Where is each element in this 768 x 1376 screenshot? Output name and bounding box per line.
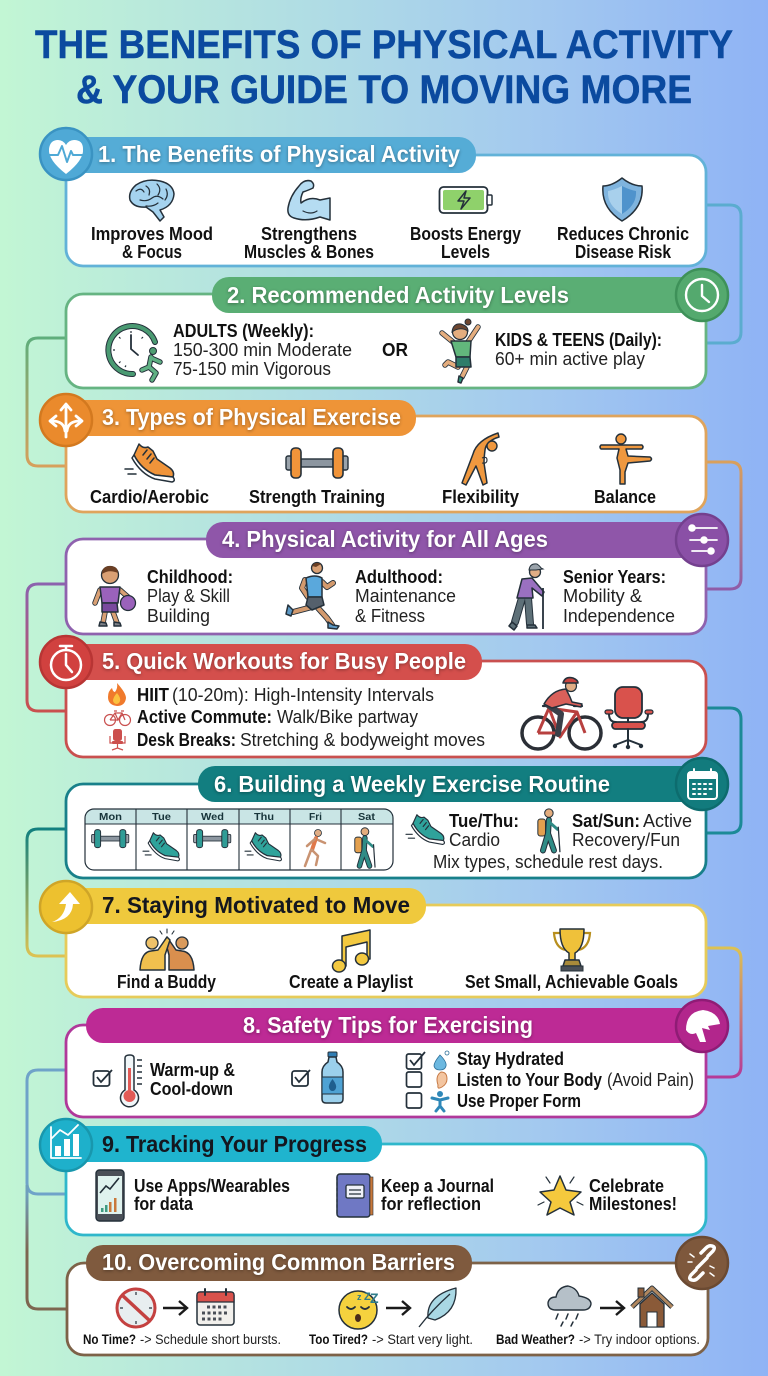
icon: brain	[130, 180, 174, 221]
text: tue thu: Cardio	[449, 829, 500, 850]
icon: thursday shoe	[245, 833, 281, 861]
text: senior: Independence	[563, 605, 675, 626]
icon: broken link badge	[676, 1237, 728, 1289]
label: boosts energy: Boosts Energy	[410, 223, 522, 244]
text: desk breaks: Stretching & bodyweight moves	[240, 729, 485, 750]
text: adults: 75-150 min Vigorous	[173, 358, 331, 379]
title	[35, 23, 733, 112]
icon: sleepy face: z	[357, 1292, 362, 1302]
connector: section 9 to 10	[27, 1185, 68, 1309]
check: proper form	[406, 1090, 581, 1111]
icon: running shoe	[125, 444, 174, 482]
text: commute: Active Commute:	[137, 706, 272, 727]
label: improves mood	[91, 223, 213, 262]
heading 10	[86, 1245, 472, 1281]
label: flexibility: Flexibility	[442, 486, 520, 507]
chart: weekly schedule: Thu	[254, 811, 274, 823]
text: childhood: Building	[147, 605, 210, 626]
icon: battery	[440, 187, 492, 213]
label: buddy: Find a Buddy	[117, 971, 217, 992]
text: no time: -> Schedule short bursts.	[140, 1332, 281, 1347]
text: sat sun	[572, 810, 692, 850]
icon: rain cloud	[548, 1286, 591, 1326]
label: reduces chronic	[557, 223, 689, 262]
text: apps: for data	[134, 1193, 194, 1214]
text: no time: No Time?	[83, 1332, 136, 1347]
label: improves mood: Improves Mood	[91, 223, 213, 244]
heading 3	[56, 400, 416, 436]
icon: sleepy face: Z	[364, 1291, 371, 1303]
icon: flame	[108, 683, 126, 706]
text: celebrate	[589, 1175, 677, 1214]
icon: monday dumbbell	[92, 830, 129, 848]
heading 9	[56, 1126, 382, 1162]
check: listen to body: Listen to Your Body	[457, 1069, 603, 1090]
label: strength: Strength Training	[249, 486, 385, 507]
arrow: tired	[386, 1301, 410, 1315]
heading 1: 1. The Benefits of Physical Activity	[98, 141, 460, 167]
label: playlist: Create a Playlist	[289, 971, 413, 992]
heading 6	[198, 766, 702, 802]
text: sat sun: Recovery/Fun	[572, 829, 680, 850]
connector: section 5 to 6	[704, 708, 741, 833]
heading 3: 3. Types of Physical Exercise	[102, 404, 401, 430]
text: senior: Senior Years:	[563, 566, 666, 587]
check: stay hydrated	[406, 1048, 564, 1070]
panel 1: benefits	[40, 128, 706, 266]
icon: star	[538, 1176, 583, 1215]
icon: house	[632, 1288, 672, 1327]
text: desk breaks	[137, 729, 485, 750]
connector: section 7 to 8	[704, 948, 741, 1077]
label: reduces chronic: Reduces Chronic	[557, 223, 689, 244]
check: listen to body	[406, 1069, 694, 1090]
panel 5: quick workouts	[40, 636, 706, 757]
text: warm up: Warm-up &	[150, 1059, 235, 1080]
text: bad weather: -> Try indoor options.	[579, 1332, 700, 1347]
arrow: time	[163, 1301, 187, 1315]
icon: sliders badge	[676, 514, 728, 566]
icon: saturday hiker	[355, 828, 375, 868]
heading 7: 7. Staying Motivated to Move	[102, 892, 410, 918]
icon: thermometer	[120, 1055, 142, 1107]
icon: sleepy face	[339, 1290, 379, 1329]
text: adults: 150-300 min Moderate	[173, 339, 352, 360]
icon: arrows badge	[40, 394, 92, 446]
text: bad weather	[496, 1332, 700, 1347]
heading 2	[212, 277, 702, 313]
text: sat sun: Active	[643, 810, 692, 831]
icon: calendar	[197, 1289, 234, 1325]
panel 10: barriers	[67, 1237, 728, 1355]
icon: feather	[419, 1288, 456, 1327]
label: reduces chronic: Disease Risk	[575, 241, 672, 262]
icon: checkbox water	[292, 1070, 310, 1086]
icon: friday runner	[305, 830, 325, 866]
icon: chart badge	[40, 1119, 92, 1171]
connector: section 8 to 9	[27, 1070, 68, 1194]
icon: tuesday shoe	[143, 833, 179, 861]
text: commute	[137, 706, 419, 727]
label: goals: Set Small, Achievable Goals	[465, 971, 678, 992]
text: or: OR	[382, 339, 408, 360]
icon: jumping kid	[442, 319, 478, 383]
icon: music notes	[332, 930, 370, 972]
connector: section 6 to 7	[27, 829, 68, 956]
text: adulthood: Adulthood:	[355, 566, 443, 587]
heading 5	[56, 644, 482, 680]
text: hiit: (10-20m): High-Intensity Intervals	[172, 684, 434, 705]
heading 1	[56, 137, 476, 173]
label: balance: Balance	[594, 486, 656, 507]
text: warm up	[150, 1059, 235, 1099]
icon: balance figure	[600, 434, 652, 484]
heading 5: 5. Quick Workouts for Busy People	[102, 648, 466, 674]
label: boosts energy	[410, 223, 522, 262]
text: apps	[134, 1175, 290, 1214]
heading 9: 9. Tracking Your Progress	[102, 1131, 367, 1157]
text: tue thu	[449, 810, 519, 850]
icon: arrow badge	[40, 881, 92, 933]
text: journal: for reflection	[381, 1193, 481, 1214]
icon: helmet badge	[676, 1000, 728, 1052]
label: strengthens	[244, 223, 374, 262]
chart: weekly schedule: Mon	[99, 811, 122, 823]
heading 7	[56, 888, 426, 924]
icon: wednesday dumbbell	[194, 830, 231, 848]
connector: section 4 to 5	[27, 584, 68, 711]
icon: trophy	[554, 929, 590, 971]
text: desk breaks: Desk Breaks:	[137, 729, 236, 750]
panel 4: all ages	[66, 514, 728, 634]
text: sat sun: Sat/Sun:	[572, 810, 640, 831]
connector: section 1 to 2	[704, 205, 741, 343]
text: tue thu: Tue/Thu:	[449, 810, 519, 831]
heading 8: 8. Safety Tips for Exercising	[243, 1012, 533, 1038]
heading 2: 2. Recommended Activity Levels	[227, 282, 569, 308]
text: warm up: Cool-down	[150, 1078, 233, 1099]
icon: calendar badge	[676, 758, 728, 810]
text: senior: Mobility &	[563, 585, 643, 606]
text: childhood: Play & Skill	[147, 585, 230, 606]
icon: stopwatch badge	[40, 636, 92, 688]
chart: weekly schedule: Fri	[309, 811, 322, 823]
panel 9: tracking	[40, 1119, 706, 1235]
icon: no time clock	[117, 1289, 155, 1327]
icon: adult runner	[286, 562, 339, 629]
text: adulthood: Maintenance	[355, 585, 456, 606]
heading 10: 10. Overcoming Common Barriers	[102, 1249, 455, 1275]
text: too tired: Too Tired?	[309, 1332, 368, 1347]
text: bad weather: Bad Weather?	[496, 1332, 575, 1347]
icon: clock with runner	[108, 326, 160, 380]
text: journal	[381, 1175, 494, 1214]
label: cardio: Cardio/Aerobic	[90, 486, 209, 507]
label: improves mood: & Focus	[122, 241, 182, 262]
icon: high five	[140, 929, 194, 970]
chart: weekly schedule: Sat	[358, 811, 376, 823]
list: safety checklist	[406, 1048, 694, 1111]
heading 6: 6. Building a Weekly Exercise Routine	[214, 771, 610, 797]
icon: phone	[96, 1170, 124, 1221]
icon: sleepy face: Z	[370, 1290, 379, 1306]
text: kids: KIDS & TEENS (Daily):	[495, 329, 662, 350]
panel 6: weekly routine	[66, 758, 728, 878]
text: childhood	[147, 566, 233, 626]
icon: journal	[337, 1174, 373, 1217]
chart: weekly schedule	[85, 809, 393, 870]
icon: flexibility figure	[462, 433, 499, 485]
panel 7: motivation	[40, 881, 706, 997]
panel 2: activity levels	[66, 269, 728, 388]
title: & YOUR GUIDE TO MOVING MORE	[76, 68, 692, 112]
label: boosts energy: Levels	[441, 241, 490, 262]
label: strengthens: Muscles & Bones	[244, 241, 374, 262]
icon: small chair	[110, 729, 125, 750]
icon: senior with cane	[509, 564, 544, 630]
icon: small bike	[104, 711, 130, 726]
check: proper form: Use Proper Form	[457, 1090, 581, 1111]
text: hiit: HIIT	[137, 684, 170, 705]
text: adulthood	[355, 566, 456, 626]
icon: water bottle	[322, 1052, 343, 1103]
check: stay hydrated: Stay Hydrated	[457, 1048, 564, 1069]
text: childhood: Childhood:	[147, 566, 233, 587]
text: adults: ADULTS (Weekly):	[173, 320, 314, 341]
text: celebrate: Milestones!	[589, 1193, 677, 1214]
panel 3: exercise types	[40, 394, 706, 512]
heading 4	[206, 522, 702, 558]
text: too tired	[309, 1332, 473, 1347]
text: senior	[563, 566, 675, 626]
label: strengthens: Strengthens	[261, 223, 357, 244]
icon: child with ball	[95, 566, 136, 626]
check: listen to body: (Avoid Pain)	[607, 1069, 694, 1090]
text: adulthood: & Fitness	[355, 605, 425, 626]
icon: cyclist	[522, 678, 601, 749]
text: no time	[83, 1332, 281, 1347]
panel 8: safety	[66, 1000, 728, 1117]
icon: office chair	[605, 687, 653, 749]
heading 8	[86, 1008, 702, 1043]
text: kids	[495, 329, 662, 369]
icon: heart badge	[40, 128, 92, 180]
text: adults	[173, 320, 352, 379]
icon: shoe cardio	[406, 815, 444, 844]
connector: section 2 to 3	[27, 338, 68, 466]
chart: weekly schedule: Tue	[152, 811, 171, 823]
icon: hiker	[538, 809, 560, 852]
text: apps: Use Apps/Wearables	[134, 1175, 290, 1196]
icon: checkbox warm-up	[94, 1070, 112, 1086]
text: mix types: Mix types, schedule rest days.	[433, 851, 663, 872]
text: celebrate: Celebrate	[589, 1175, 664, 1196]
icon: flexed arm	[288, 181, 330, 220]
icon: shield	[603, 178, 642, 221]
icon: clock badge	[676, 269, 728, 321]
heading 4: 4. Physical Activity for All Ages	[222, 526, 548, 552]
text: journal: Keep a Journal	[381, 1175, 494, 1196]
text: too tired: -> Start very light.	[372, 1332, 473, 1347]
arrow: weather	[600, 1301, 624, 1315]
text: commute: Walk/Bike partway	[277, 706, 419, 727]
icon: dumbbell	[286, 448, 348, 478]
text: kids: 60+ min active play	[495, 348, 646, 369]
connector: section 3 to 4	[704, 462, 741, 589]
chart: weekly schedule: Wed	[201, 811, 224, 823]
